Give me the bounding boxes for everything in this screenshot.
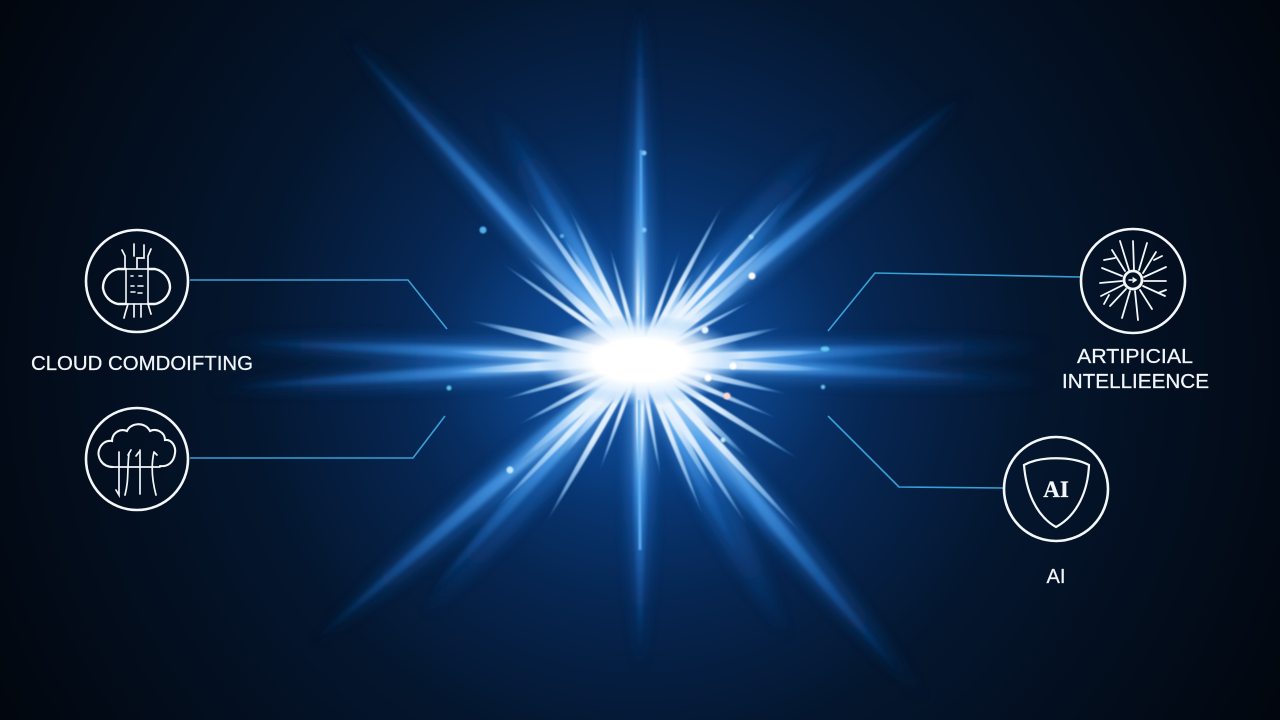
wide faint beams [200,0,1060,714]
label: AI: AI [1047,566,1065,588]
label: artificial intelligence [1062,346,1209,393]
label: cloud computing: CLOUD COMDOIFTING [31,352,253,375]
icon: AI shield: AI [1043,477,1069,502]
bright core [535,314,745,406]
icon: cloud chip [86,230,188,332]
connector: cloud computing [190,280,447,329]
label: artificial intelligence: INTELLIEENCE [1062,371,1209,393]
medium bright rays [440,194,840,538]
icon: AI shield [1004,437,1108,541]
label: artificial intelligence: ARTIPICIAL [1077,346,1193,368]
connector: cloud [190,416,445,458]
icon: neural burst [1081,229,1185,333]
central light burst [200,0,1060,714]
burst halo [430,210,850,510]
connector: artificial intelligence [828,273,1080,331]
connector: AI [828,416,1003,488]
light sparks [446,150,830,474]
vertical bright core streak [639,0,643,550]
icon: cloud with circuits [86,408,188,510]
long sharp beams [221,0,1000,684]
